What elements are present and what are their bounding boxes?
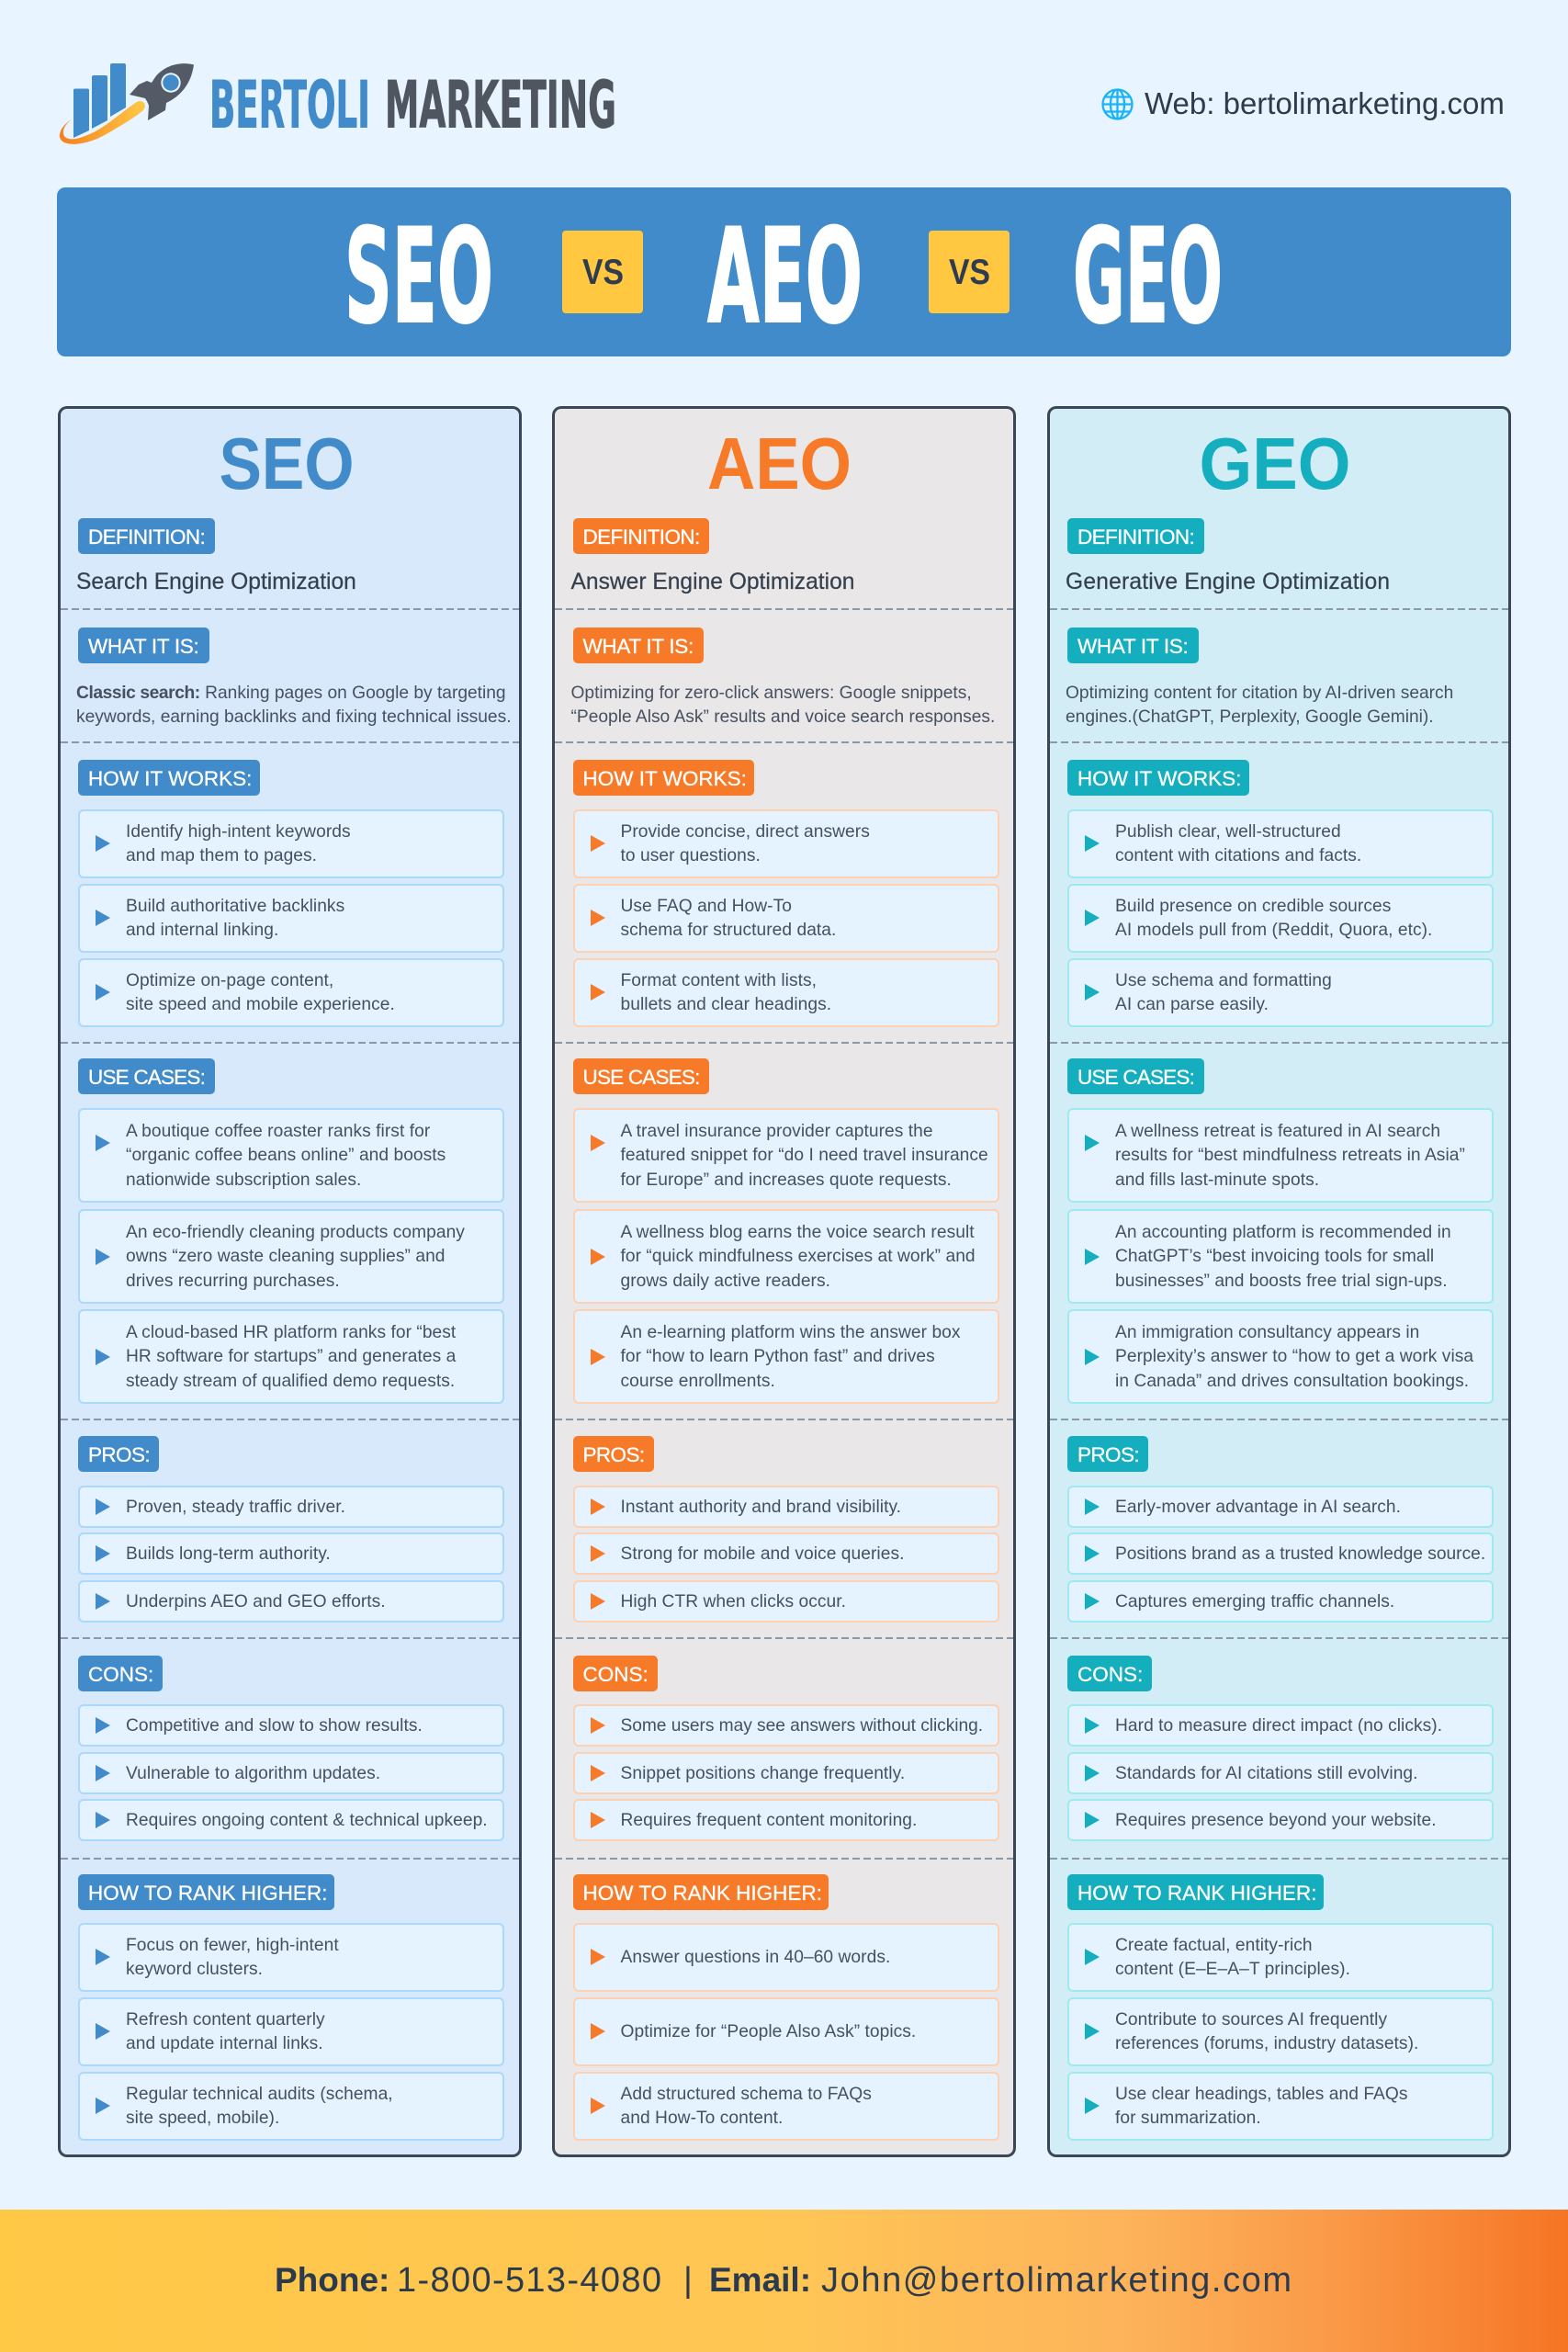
- badge: definition: [78, 518, 215, 554]
- item: [78, 2072, 504, 2141]
- item: [573, 1997, 999, 2065]
- item: Build authoritative backlinks: [126, 897, 344, 916]
- item: grows daily active readers.: [621, 1272, 830, 1291]
- heading: SEO: SEO: [219, 423, 354, 504]
- item: [573, 1923, 999, 1992]
- item: owns “zero waste cleaning supplies” and: [126, 1247, 446, 1266]
- badge: pros: PROS:: [1077, 1442, 1139, 1466]
- title banner: [57, 187, 1511, 356]
- item: content (E–E–A–T principles).: [1115, 1960, 1350, 1979]
- item: references (forums, industry datasets).: [1115, 2034, 1418, 2053]
- item: and map them to pages.: [126, 846, 317, 865]
- item: High CTR when clicks occur.: [621, 1592, 846, 1611]
- item: Optimize for “People Also Ask” topics.: [621, 2022, 916, 2041]
- what it is text: Classic search: Ranking pages on Google by targeting: [76, 684, 506, 703]
- item: A wellness blog earns the voice search result: [621, 1223, 975, 1242]
- item: Positions brand as a trusted knowledge source.: [1115, 1544, 1485, 1564]
- item: Use clear headings, tables and FAQs: [1115, 2085, 1408, 2104]
- panel: SEO: [57, 406, 522, 2157]
- definition text: Generative Engine Optimization: [1066, 570, 1390, 594]
- item: [78, 1704, 504, 1747]
- item: ChatGPT’s “best invoicing tools for small: [1115, 1247, 1434, 1266]
- item: Snippet positions change frequently.: [621, 1764, 905, 1783]
- item: Underpins AEO and GEO efforts.: [126, 1592, 386, 1611]
- item: [1067, 1532, 1494, 1575]
- item: [78, 958, 504, 1027]
- badge: how it works: [78, 760, 259, 796]
- email address: John@bertolimarketing.com: [821, 2261, 1293, 2300]
- item: [78, 1997, 504, 2065]
- badge: use cases: [573, 1058, 709, 1094]
- item: [573, 1309, 999, 1404]
- item: Refresh content quarterly: [126, 2010, 325, 2030]
- item: Proven, steady traffic driver.: [126, 1498, 345, 1517]
- item: [573, 1799, 999, 1841]
- logo wordmark: BERTOLI: [209, 68, 370, 143]
- email label: Email:: [709, 2261, 811, 2299]
- web text: Web: bertolimarketing.com: [1145, 86, 1505, 120]
- title banner: GEO: [1073, 201, 1223, 353]
- item: [78, 1209, 504, 1304]
- item: Answer questions in 40–60 words.: [621, 1948, 890, 1967]
- item: [1067, 1752, 1494, 1794]
- item: Create factual, entity-rich: [1115, 1936, 1313, 1955]
- item: [1067, 809, 1494, 878]
- section: how to rank higher: [573, 1874, 999, 2141]
- badge: definition: DEFINITION:: [1077, 526, 1194, 548]
- item: Focus on fewer, high-intent: [126, 1936, 339, 1955]
- icon: globe: [1101, 88, 1134, 120]
- badge: what it is: WHAT IT IS:: [1077, 634, 1188, 658]
- item: AI can parse easily.: [1115, 995, 1269, 1014]
- item: Early-mover advantage in AI search.: [1115, 1498, 1401, 1517]
- item: [573, 1486, 999, 1528]
- item: Optimize on-page content,: [126, 971, 333, 990]
- definition text: Search Engine Optimization: [76, 570, 356, 594]
- item: [1067, 1923, 1494, 1992]
- panel: AEO: [552, 406, 1016, 2157]
- item: and internal linking.: [126, 921, 278, 940]
- section: use cases: [78, 1058, 504, 1404]
- item: [78, 1486, 504, 1528]
- badge: cons: [573, 1656, 658, 1691]
- section: how to rank higher: [1067, 1874, 1494, 2141]
- item: [1067, 1209, 1494, 1304]
- item: for “how to learn Python fast” and drives: [621, 1347, 935, 1366]
- badge: definition: [1067, 518, 1203, 554]
- badge: use cases: USE CASES:: [88, 1066, 205, 1088]
- item: site speed and mobile experience.: [126, 995, 395, 1014]
- badge: pros: PROS:: [88, 1442, 150, 1466]
- badge: how it works: HOW IT WORKS:: [582, 766, 747, 790]
- item: Vulnerable to algorithm updates.: [126, 1764, 380, 1783]
- badge: how it works: HOW IT WORKS:: [1077, 766, 1241, 790]
- item: and update internal links.: [126, 2034, 323, 2053]
- item: Contribute to sources AI frequently: [1115, 2010, 1387, 2030]
- item: results for “best mindfulness retreats in Asia”: [1115, 1146, 1465, 1165]
- title words: AEO: [707, 201, 863, 353]
- badge: use cases: USE CASES:: [1077, 1066, 1194, 1088]
- badge: pros: [573, 1436, 654, 1472]
- item: Strong for mobile and voice queries.: [621, 1544, 904, 1564]
- badge: how it works: [573, 760, 754, 796]
- section: what it is: [1066, 628, 1453, 727]
- item: Requires ongoing content & technical upkeep.: [126, 1811, 488, 1830]
- badge: pros: PROS:: [582, 1442, 645, 1466]
- badge: what it is: [1067, 628, 1198, 663]
- item: for “quick mindfulness exercises at work” and: [621, 1247, 976, 1266]
- section: how it works: [1067, 760, 1494, 1027]
- item: Add structured schema to FAQs: [621, 2085, 872, 2104]
- item: and fills last-minute spots.: [1115, 1170, 1319, 1190]
- item: featured snippet for “do I need travel insurance: [621, 1146, 988, 1165]
- item: [78, 1532, 504, 1575]
- section: cons: [1067, 1656, 1494, 1841]
- item: A boutique coffee roaster ranks first for: [126, 1122, 430, 1141]
- item: course enrollments.: [621, 1372, 775, 1391]
- item: Build presence on credible sources: [1115, 897, 1391, 916]
- item: [1067, 1486, 1494, 1528]
- item: Requires presence beyond your website.: [1115, 1811, 1437, 1830]
- item: Hard to measure direct impact (no clicks).: [1115, 1716, 1442, 1736]
- badge: how to rank higher: [573, 1874, 829, 1910]
- badge: cons: [78, 1656, 163, 1691]
- item: An e-learning platform wins the answer box: [621, 1323, 961, 1342]
- badge: pros: [78, 1436, 159, 1472]
- item: An accounting platform is recommended in: [1115, 1223, 1451, 1242]
- item: schema for structured data.: [621, 921, 836, 940]
- vs badge 2: [929, 231, 1010, 313]
- badge: definition: DEFINITION:: [88, 526, 205, 548]
- item: bullets and clear headings.: [621, 995, 831, 1014]
- item: Captures emerging traffic channels.: [1115, 1592, 1394, 1611]
- badge: what it is: WHAT IT IS:: [582, 634, 694, 658]
- what it is text: Optimizing content for citation by AI-driven search: [1066, 684, 1453, 703]
- badge: use cases: [1067, 1058, 1203, 1094]
- item: [1067, 1799, 1494, 1841]
- item: [78, 1799, 504, 1841]
- item: Instant authority and brand visibility.: [621, 1498, 901, 1517]
- title words: SEO: [344, 201, 493, 353]
- section: what it is: [76, 628, 512, 727]
- icon: rocket: [130, 63, 194, 120]
- section: definition: [570, 518, 854, 594]
- item: [573, 1209, 999, 1304]
- section: use cases: [573, 1058, 999, 1404]
- item: to user questions.: [621, 846, 761, 865]
- definition text: Answer Engine Optimization: [571, 570, 854, 594]
- item: Provide concise, direct answers: [621, 822, 870, 842]
- footer contact bar: [0, 2210, 1568, 2352]
- section: pros: [573, 1436, 999, 1623]
- item: Format content with lists,: [621, 971, 817, 990]
- badge: use cases: [78, 1058, 215, 1094]
- item: A travel insurance provider captures the: [621, 1122, 933, 1141]
- section: cons: [78, 1656, 504, 1841]
- item: [1067, 1704, 1494, 1747]
- badge: how to rank higher: HOW TO RANK HIGHER:: [1077, 1882, 1316, 1904]
- item: An immigration consultancy appears in: [1115, 1323, 1419, 1342]
- badge: how to rank higher: HOW TO RANK HIGHER:: [88, 1882, 327, 1904]
- badge: how to rank higher: [1067, 1874, 1323, 1910]
- item: HR software for startups” and generates a: [126, 1347, 456, 1366]
- item: “organic coffee beans online” and boosts: [126, 1146, 446, 1165]
- item: [573, 1580, 999, 1623]
- item: [573, 2072, 999, 2141]
- badge: cons: CONS:: [88, 1663, 153, 1685]
- item: for Europe” and increases quote requests.: [621, 1170, 952, 1190]
- section: use cases: [1067, 1058, 1494, 1404]
- item: [573, 884, 999, 952]
- badge: how it works: HOW IT WORKS:: [88, 766, 252, 790]
- item: [1067, 958, 1494, 1027]
- vs badge 1: VS: [582, 253, 624, 292]
- item: [1067, 1108, 1494, 1203]
- badge: cons: CONS:: [582, 1663, 649, 1685]
- section: pros: [78, 1436, 504, 1623]
- item: Standards for AI citations still evolving.: [1115, 1764, 1418, 1783]
- separator: |: [683, 2261, 693, 2300]
- web address: [1101, 86, 1505, 120]
- item: An eco-friendly cleaning products company: [126, 1223, 465, 1242]
- heading: GEO: GEO: [1199, 423, 1350, 504]
- item: [573, 1532, 999, 1575]
- badge: what it is: [573, 628, 704, 663]
- item: [78, 1108, 504, 1203]
- title words: [344, 201, 1223, 353]
- item: site speed, mobile).: [126, 2109, 279, 2128]
- item: drives recurring purchases.: [126, 1272, 340, 1291]
- item: [573, 958, 999, 1027]
- logo: Bertoli Marketing: [59, 63, 616, 144]
- badge: cons: CONS:: [1077, 1663, 1143, 1685]
- item: keyword clusters.: [126, 1960, 263, 1979]
- item: in Canada” and drives consultation bookings.: [1115, 1372, 1469, 1391]
- vs badge 1: [562, 231, 643, 313]
- item: Use schema and formatting: [1115, 971, 1332, 990]
- item: [78, 884, 504, 952]
- what it is text: engines.(ChatGPT, Perplexity, Google Gemini).: [1066, 707, 1434, 727]
- item: [573, 1108, 999, 1203]
- section: cons: [573, 1656, 999, 1841]
- item: Competitive and slow to show results.: [126, 1716, 423, 1736]
- badge: pros: [1067, 1436, 1148, 1472]
- phone number: 1-800-513-4080: [397, 2261, 662, 2300]
- item: steady stream of qualified demo requests.: [126, 1372, 455, 1391]
- badge: use cases: USE CASES:: [582, 1066, 700, 1088]
- item: [78, 809, 504, 878]
- item: for summarization.: [1115, 2109, 1261, 2128]
- item: AI models pull from (Reddit, Quora, etc).: [1115, 921, 1432, 940]
- section: how it works: [573, 760, 999, 1027]
- badge: cons: [1067, 1656, 1152, 1691]
- item: Perplexity’s answer to “how to get a work visa: [1115, 1347, 1473, 1366]
- item: Use FAQ and How-To: [621, 897, 792, 916]
- item: A wellness retreat is featured in AI search: [1115, 1122, 1440, 1141]
- item: Regular technical audits (schema,: [126, 2085, 393, 2104]
- item: Some users may see answers without clicking.: [621, 1716, 983, 1736]
- item: nationwide subscription sales.: [126, 1170, 361, 1190]
- item: [78, 1580, 504, 1623]
- badge: how it works: [1067, 760, 1249, 796]
- item: [1067, 1997, 1494, 2065]
- item: [78, 1923, 504, 1992]
- item: [573, 1704, 999, 1747]
- what it is text: “People Also Ask” results and voice search responses.: [571, 707, 995, 727]
- item: Identify high-intent keywords: [126, 822, 351, 842]
- item: [78, 1309, 504, 1404]
- section: what it is: [571, 628, 995, 727]
- what it is text: Optimizing for zero-click answers: Google snippets,: [571, 684, 972, 703]
- phone label: Phone:: [275, 2261, 389, 2299]
- what it is text: [1066, 684, 1453, 727]
- item: [78, 1752, 504, 1794]
- vs badge 2: VS: [949, 253, 990, 292]
- heading: AEO: AEO: [707, 423, 852, 504]
- what it is text: [571, 684, 995, 727]
- badge: definition: DEFINITION:: [582, 526, 700, 548]
- section: how to rank higher: [78, 1874, 504, 2141]
- item: Publish clear, well-structured: [1115, 822, 1341, 842]
- badge: how to rank higher: HOW TO RANK HIGHER:: [582, 1882, 822, 1904]
- item: [1067, 884, 1494, 952]
- badge: how to rank higher: [78, 1874, 334, 1910]
- item: [1067, 1580, 1494, 1623]
- item: A cloud-based HR platform ranks for “best: [126, 1323, 456, 1342]
- what it is text: keywords, earning backlinks and fixing technical issues.: [76, 707, 512, 727]
- section: definition: [76, 518, 356, 594]
- icon: orange swoosh: [60, 101, 145, 144]
- item: [1067, 2072, 1494, 2141]
- item: businesses” and boosts free trial sign-ups.: [1115, 1272, 1448, 1291]
- badge: what it is: [78, 628, 209, 663]
- section: pros: [1067, 1436, 1494, 1623]
- what it is text: [76, 684, 512, 727]
- item: [573, 1752, 999, 1794]
- item: content with citations and facts.: [1115, 846, 1361, 865]
- section: definition: [1066, 518, 1390, 594]
- item: [573, 809, 999, 878]
- item: Builds long-term authority.: [126, 1544, 331, 1564]
- item: [1067, 1309, 1494, 1404]
- item: Requires frequent content monitoring.: [621, 1811, 917, 1830]
- badge: definition: [573, 518, 709, 554]
- section: how it works: [78, 760, 504, 1027]
- item: and How-To content.: [621, 2109, 783, 2128]
- badge: what it is: WHAT IT IS:: [88, 634, 198, 658]
- icon: rising bars: [73, 63, 126, 138]
- panel: GEO: [1047, 406, 1510, 2157]
